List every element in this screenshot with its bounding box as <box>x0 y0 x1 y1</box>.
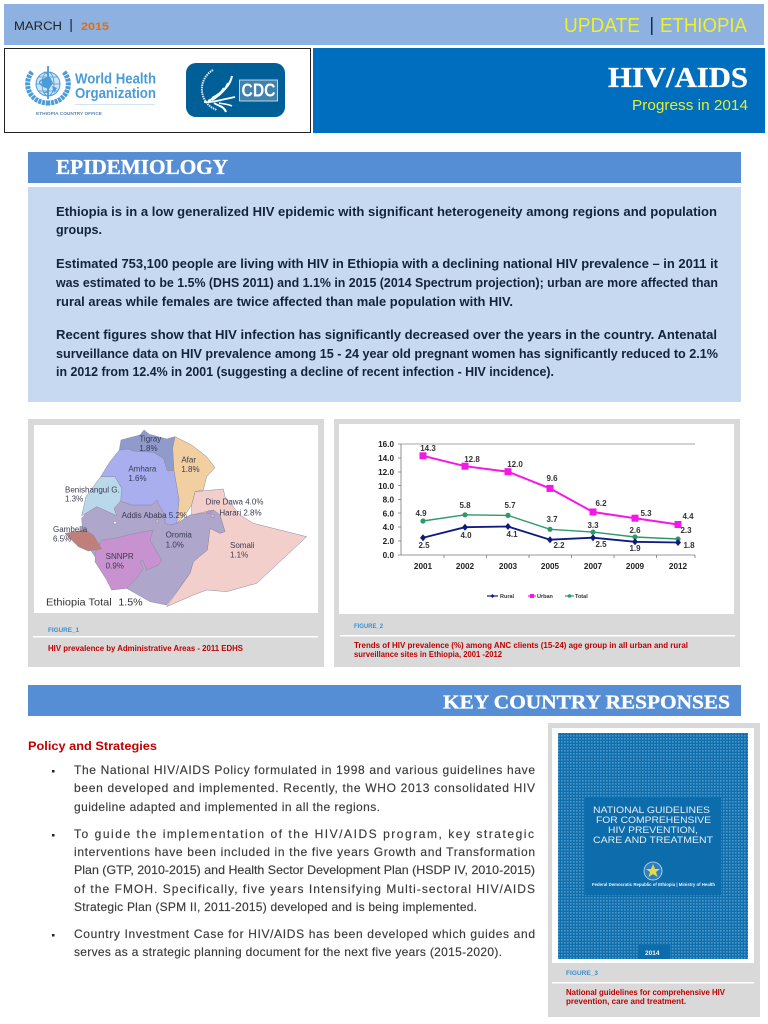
map labels: Addis Ababa 5.2% <box>122 511 187 520</box>
bullet 3 <box>52 927 535 959</box>
title: HIV/AIDS <box>608 63 748 94</box>
paragraph 1: Ethiopia is in a low generalized HIV epidemic with significant heterogeneity among regions and population <box>56 205 717 219</box>
subtitle: Progress in 2014 <box>632 98 748 114</box>
x axis labels: 2012 <box>669 562 688 571</box>
data labels <box>415 444 695 553</box>
data labels: 1.8 <box>683 541 695 550</box>
paragraph 2 <box>55 257 719 309</box>
map labels: Tigray <box>139 435 161 444</box>
paragraph 1 <box>56 205 717 237</box>
figure 3 caption: FIGURE_3 <box>566 970 598 977</box>
series: rural <box>420 523 681 546</box>
data labels: 2.6 <box>629 526 641 535</box>
paragraph 2: was estimated to be 1.5% (DHS 2011) and 1.1% in 2015 (2014 Spectrum projection); urban are more affected than <box>55 276 718 290</box>
panel: epidemiology text <box>28 187 741 402</box>
data labels: 1.9 <box>629 544 641 553</box>
bullet 2: To guide the implementation of the HIV/AIDS program, key strategic <box>74 827 534 841</box>
y axis labels: 12.0 <box>378 468 394 477</box>
map labels: Somali <box>230 541 255 550</box>
data labels: 4.0 <box>460 531 472 540</box>
data labels: 12.0 <box>507 460 523 469</box>
data labels: 4.9 <box>415 509 427 518</box>
figure 2 caption <box>340 623 735 659</box>
figure 3 caption <box>552 970 754 1006</box>
bullet 3: serves as a strategic planning document for the next five years (2015-2020). <box>74 945 502 959</box>
figure 2 caption: FIGURE_2 <box>354 623 383 630</box>
chart legend: Urban <box>537 594 554 600</box>
chart legend: Rural <box>500 594 515 600</box>
World Health Organization wordmark: ETHIOPIA COUNTRY OFFICE <box>36 111 103 117</box>
logo panel <box>4 48 310 132</box>
bullet 1 <box>52 763 535 814</box>
bullet 2: Plan (GTP, 2010-2015) and Health Sector Development Plan (HSDP IV, 2010-2015) <box>74 863 535 877</box>
map labels: 1.8% <box>139 444 158 453</box>
x axis labels: 2005 <box>541 562 560 571</box>
y axis labels: 0.0 <box>383 551 394 560</box>
figure 1 caption: HIV prevalence by Administrative Areas - 2011 EDHS <box>48 644 244 653</box>
data labels: 3.7 <box>546 515 558 524</box>
map labels: Oromia <box>166 531 192 540</box>
figure 3 caption: National guidelines for comprehensive HIV <box>566 988 726 997</box>
line chart <box>378 440 695 600</box>
y axis labels: 14.0 <box>378 454 394 463</box>
icon: CDC logo <box>186 63 285 117</box>
guideline cover image: Federal Democratic Republic of Ethiopia | Ministry of Health <box>592 882 715 887</box>
map labels: Ethiopia Total <box>46 598 112 609</box>
icon: CDC logo: CDC <box>242 80 276 100</box>
top banner <box>4 4 764 45</box>
data labels: 5.8 <box>459 501 471 510</box>
x axis labels: 2003 <box>499 562 518 571</box>
guideline cover image: NATIONAL GUIDELINES <box>593 805 710 815</box>
bullet 1: been developed and implemented. Recently, the WHO 2013 consolidated HIV <box>74 781 535 795</box>
World Health Organization wordmark: Organization <box>75 85 156 102</box>
map labels: 1.6% <box>128 474 147 483</box>
chart legend <box>487 594 588 600</box>
data labels: 4.4 <box>682 512 694 521</box>
guideline cover image: CARE AND TREATMENT <box>593 835 714 845</box>
bullet 2 <box>52 827 535 914</box>
update label: ETHIOPIA <box>660 15 748 37</box>
paragraph 2: rural areas while females are twice affected than male population with HIV. <box>56 295 513 309</box>
map labels: 1.1% <box>230 551 248 560</box>
y axis labels: 2.0 <box>383 537 394 546</box>
bullet 3: Country Investment Case for HIV/AIDS has been developed which guides and <box>74 927 535 941</box>
bullet list <box>52 763 535 959</box>
guideline cover image: 2014 <box>645 950 660 957</box>
x axis labels: 2007 <box>584 562 603 571</box>
paragraph 2: Estimated 753,100 people are living with HIV in Ethiopia with a declining national HIV prevalence – in 2011 it <box>56 257 719 271</box>
guideline cover image <box>558 733 748 959</box>
data labels: 2.5 <box>418 541 430 550</box>
paragraph 1: groups. <box>56 223 102 237</box>
y axis labels: 6.0 <box>383 510 394 518</box>
data labels: 14.3 <box>420 444 436 453</box>
map labels: Dire Dawa 4.0% <box>206 497 263 506</box>
x axis labels: 2009 <box>626 562 645 571</box>
subheading: policy and strategies: Policy and Strategies <box>28 739 157 753</box>
map labels <box>46 435 263 609</box>
data labels: 4.1 <box>506 530 518 539</box>
data labels: 2.2 <box>553 541 565 550</box>
figure 1 caption <box>33 627 318 653</box>
y axis labels: 16.0 <box>378 440 394 449</box>
data labels: 5.3 <box>640 509 652 518</box>
y axis labels <box>378 440 394 560</box>
map labels: Harari 2.8% <box>219 509 262 518</box>
map labels: Afar <box>181 456 196 465</box>
bullet 2: of the FMOH. Specifically, five years Intensifying Multi-sectoral HIV/AIDS <box>74 882 535 896</box>
data labels: 3.3 <box>587 521 599 530</box>
paragraph 3: surveillance data on HIV prevalence among 15 - 24 year old pregnant women has significantly reduced to 2.1% <box>56 347 718 361</box>
map labels: Gambella <box>53 525 88 534</box>
map labels: 0.9% <box>106 562 124 571</box>
figure 2 caption: Trends of HIV prevalence (%) among ANC clients (15-24) age group in all urban and rural <box>354 641 688 650</box>
map labels: 6.5% <box>53 534 71 543</box>
title panel <box>313 48 765 133</box>
date: March 2015: MARCH <box>14 21 62 33</box>
date: March 2015: 2015 <box>81 21 109 33</box>
guideline cover image: FOR COMPREHENSIVE <box>596 815 711 825</box>
data labels: 12.8 <box>464 455 480 464</box>
map labels: 1.3% <box>65 495 83 504</box>
icon: Ethiopian emblem <box>644 862 662 880</box>
x axis labels: 2001 <box>414 562 433 571</box>
map labels: Amhara <box>128 465 157 474</box>
y axis labels: 4.0 <box>383 523 394 532</box>
data labels: 2.5 <box>595 540 607 549</box>
data labels: 9.6 <box>546 474 558 483</box>
map labels: 1.8% <box>181 465 200 474</box>
bullet 2: interventions have been included in the five years Growth and Transformation <box>74 845 535 859</box>
y axis labels: 8.0 <box>383 496 394 504</box>
chart legend: Total <box>575 594 588 600</box>
series: urban <box>420 452 682 528</box>
bullet 1: guideline adapted and implemented in all the regions. <box>74 800 380 814</box>
figure 1 caption: FIGURE_1 <box>48 627 79 634</box>
paragraph 3: in 2012 from 12.4% in 2001 (suggesting a decline of recent infection - HIV incidence). <box>56 365 554 379</box>
guideline cover image: HIV PREVENTION, <box>608 825 698 835</box>
map labels: 1.0% <box>166 541 184 550</box>
figure 3 caption: prevention, care and treatment. <box>566 997 686 1006</box>
map labels: 1.5% <box>118 598 143 609</box>
World Health Organization wordmark: World Health <box>75 70 156 88</box>
paragraph 3: Recent figures show that HIV infection has significantly decreased over the years in the country. Antenatal <box>56 328 717 342</box>
heading: Epidemiology: EPIDEMIOLOGY <box>56 155 228 179</box>
bullet 2: Strategic Plan (SPM II, 2011-2015) developed and is being implemented. <box>74 900 477 914</box>
y axis labels: 10.0 <box>378 482 394 491</box>
data labels: 6.2 <box>595 499 607 508</box>
series: total <box>420 512 681 542</box>
World Health Organization wordmark <box>36 70 156 117</box>
update label <box>564 15 748 37</box>
update label: UPDATE <box>564 15 640 37</box>
x axis labels <box>414 562 688 571</box>
heading: Key country responses <box>28 685 741 716</box>
figure 2 caption: surveillance sites in Ethiopia, 2001 -2012 <box>354 650 503 659</box>
data labels: 2.3 <box>680 526 692 535</box>
icon: WHO emblem <box>28 66 68 103</box>
panel: figure 1 map <box>28 419 324 667</box>
heading: Key country responses: KEY COUNTRY RESPONSES <box>443 692 730 714</box>
map of Ethiopia <box>46 430 307 609</box>
data labels: 5.7 <box>504 501 516 510</box>
date: March 2015 <box>14 19 109 33</box>
heading: Epidemiology <box>28 152 741 183</box>
panel: figure 3 guideline cover <box>548 723 760 1017</box>
x axis labels: 2002 <box>456 562 475 571</box>
bullet 1: The National HIV/AIDS Policy formulated in 1998 and various guidelines have <box>74 763 535 777</box>
map labels: Benishangul G. <box>65 485 120 494</box>
paragraph 3 <box>56 328 718 379</box>
map labels: SNNPR <box>106 552 134 561</box>
panel: figure 2 chart <box>334 419 740 667</box>
